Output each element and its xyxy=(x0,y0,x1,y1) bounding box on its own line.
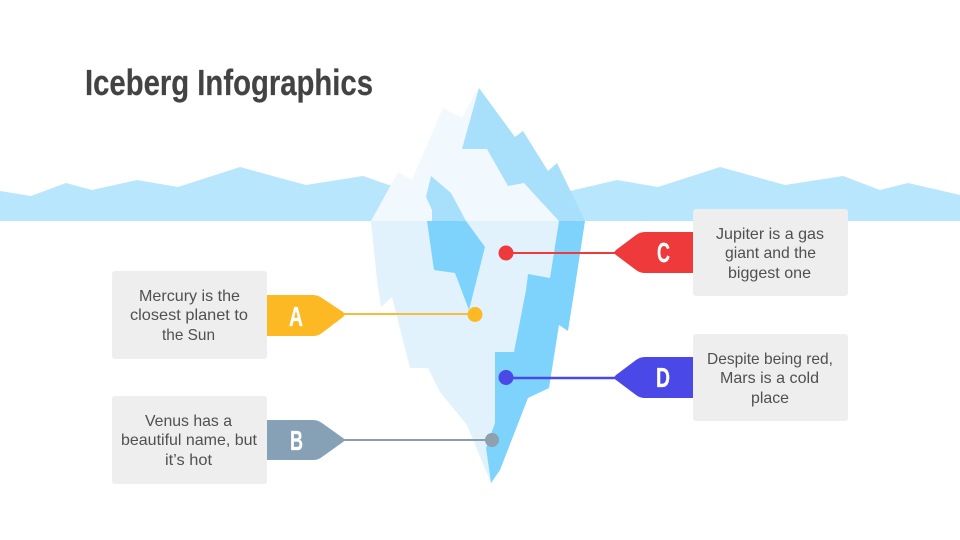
panel: Venus: it’s hot xyxy=(165,452,213,469)
connector A xyxy=(340,307,482,322)
panel: Jupiter: biggest one xyxy=(728,265,811,282)
panel: Mercury: Mercury is the xyxy=(139,288,240,305)
connector C xyxy=(498,246,620,260)
tag D xyxy=(614,357,693,398)
panel: Mercury: closest planet to xyxy=(130,307,248,324)
tag A: A xyxy=(289,301,303,332)
tag B xyxy=(267,420,344,460)
tag C: C xyxy=(657,237,670,268)
panel: Jupiter: Jupiter is a gas xyxy=(716,226,824,243)
iceberg xyxy=(371,88,585,483)
iceberg below water xyxy=(371,221,585,483)
panel: Mercury xyxy=(112,271,267,359)
connector D xyxy=(498,370,620,385)
panel: Mercury: the Sun xyxy=(162,327,215,344)
iceberg above water xyxy=(371,88,585,221)
panel: Mars: Mars is a cold xyxy=(720,370,819,387)
panel: Mars: place xyxy=(751,390,789,407)
panel: Venus xyxy=(112,396,267,484)
panel: Venus: beautiful name, but xyxy=(121,432,258,449)
tag C xyxy=(614,232,693,273)
title: Iceberg Infographics xyxy=(85,62,373,103)
tag B: B xyxy=(290,425,303,456)
tag D: D xyxy=(656,362,670,393)
panel: Jupiter xyxy=(693,209,848,296)
panel: Mars xyxy=(693,334,848,421)
panel: Mars: Despite being red, xyxy=(707,351,833,368)
panel: Jupiter: giant and the xyxy=(725,245,816,262)
tag A xyxy=(267,295,344,336)
panel: Venus: Venus has a xyxy=(145,413,232,430)
connector B xyxy=(340,433,499,447)
distant ice horizon xyxy=(0,167,960,221)
